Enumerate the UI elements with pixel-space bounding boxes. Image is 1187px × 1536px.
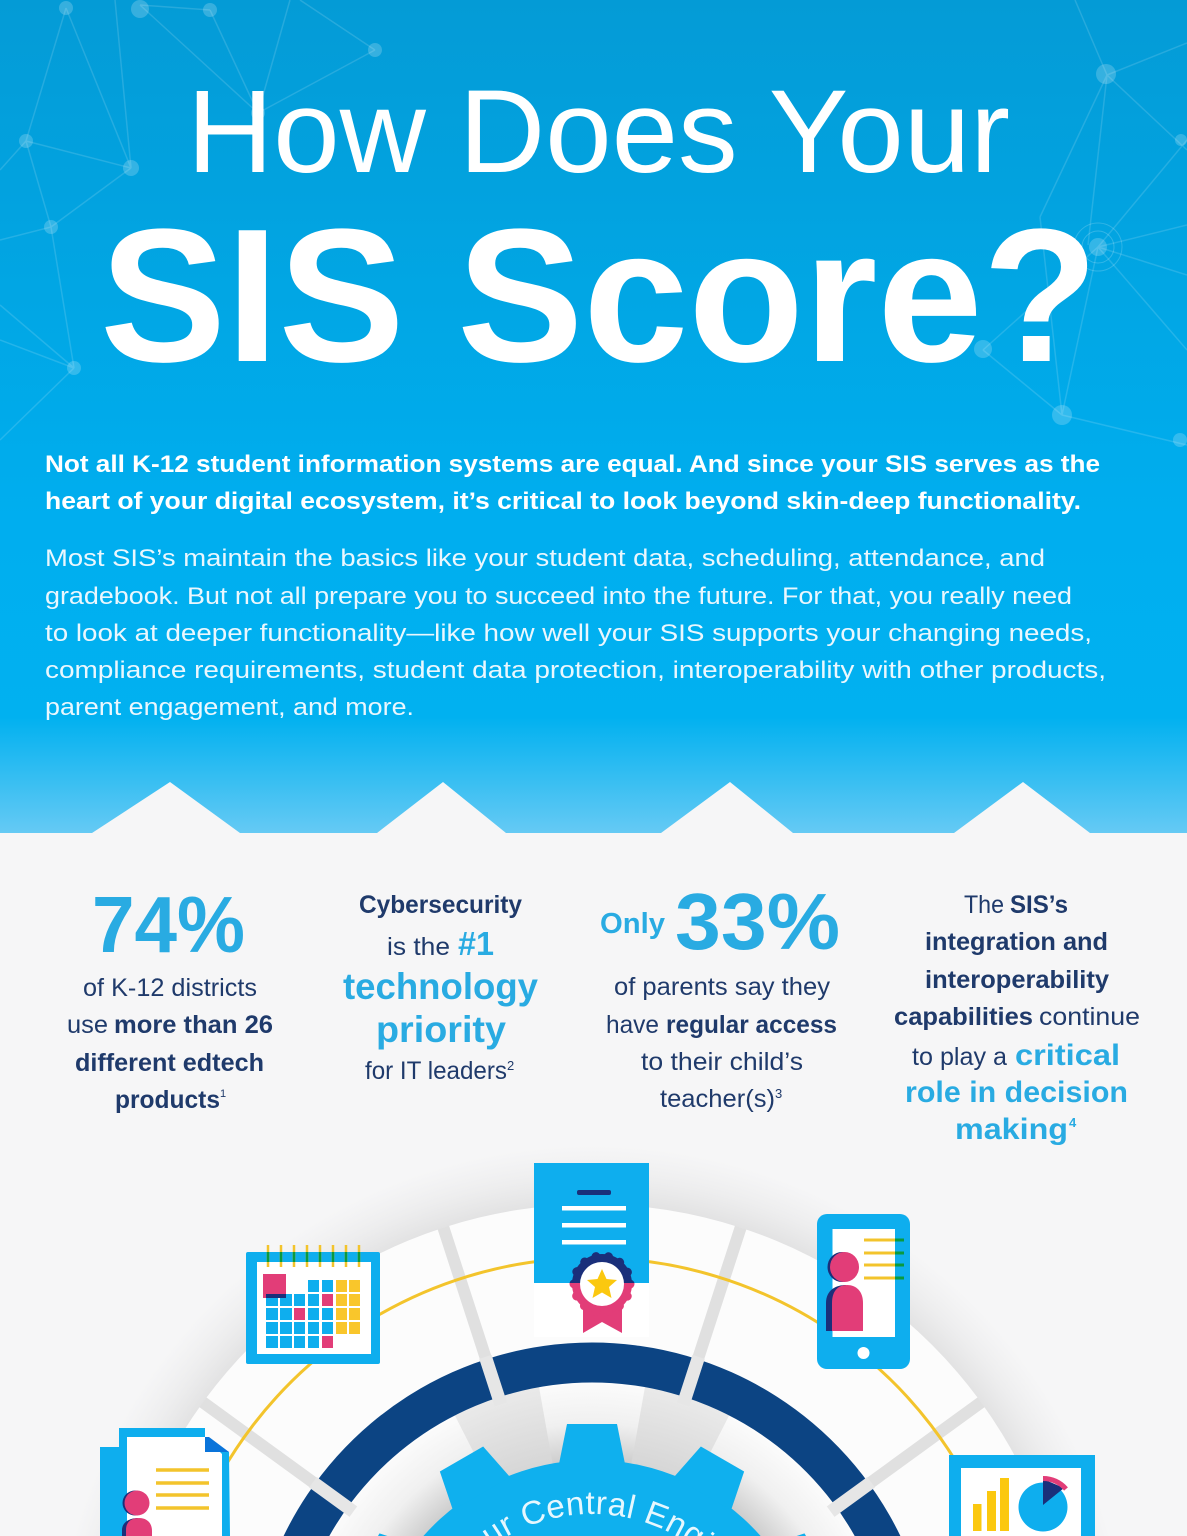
icon: chart [949, 1455, 1095, 1536]
icon: certificate [534, 1163, 649, 1337]
wheel disc [73, 1145, 1111, 1536]
stat: only 33%: Only [600, 908, 665, 940]
header background [0, 0, 1187, 834]
stat: cybersecurity: Cybersecurity [359, 891, 522, 919]
stat: cybersecurity: technology [343, 966, 538, 1007]
intro paragraph: Most SIS’s maintain the basics like your student data, scheduling, attendance, and [45, 545, 1045, 572]
stat: 74%: 1 [220, 1088, 226, 1100]
stat: only 33%: teacher(s) [660, 1085, 775, 1113]
stat: cybersecurity [343, 891, 538, 1085]
stat: integration: to play a [912, 1043, 1007, 1071]
wheel diagram [153, 1179, 1046, 1536]
network pattern left [0, 0, 375, 440]
title: SIS Score? [100, 190, 1098, 402]
light lower panel with peaks [0, 782, 1187, 1536]
stat: integration: continue [1039, 1003, 1140, 1031]
title: How Does Your [187, 66, 1010, 198]
intro text bold [45, 451, 1100, 515]
stat: cybersecurity: for IT leaders [365, 1057, 507, 1085]
wheel spokes outer [203, 1228, 981, 1506]
stat: only 33%: 3 [775, 1086, 782, 1101]
stat: only 33%: regular access [666, 1011, 837, 1039]
gear [378, 1424, 806, 1536]
stat: cybersecurity: 2 [507, 1058, 514, 1073]
dark blue ring [284, 1342, 900, 1536]
stat: integration: The [964, 891, 1004, 919]
intro paragraph: to look at deeper functionality—like how well your SIS supports your changing needs, [45, 620, 1092, 647]
icon: document [100, 1428, 230, 1536]
stat: integration: critical [1015, 1039, 1120, 1072]
network nodes left [19, 0, 382, 375]
stat: 74%: products [115, 1086, 220, 1114]
stat: 74%: use [67, 1011, 108, 1039]
stat: 74%: different edtech [75, 1049, 264, 1077]
stat: integration: making [955, 1113, 1068, 1146]
intro paragraph: gradebook. But not all prepare you to succeed into the future. For that, you really need [45, 583, 1072, 610]
yellow orbit [192, 1258, 992, 1536]
stat: integration: interoperability [925, 966, 1109, 994]
title [100, 66, 1098, 402]
stat: cybersecurity: is the [387, 933, 450, 961]
stat: cybersecurity: priority [376, 1009, 506, 1050]
stat: only 33%: of parents say they [614, 973, 831, 1001]
stat: only 33%: 33% [675, 877, 840, 966]
stat: 74%: 74% [92, 880, 245, 969]
network nodes right [974, 64, 1187, 447]
stat: 74% [67, 880, 273, 1114]
intro paragraph: parent engagement, and more. [45, 694, 414, 721]
intro text bold: heart of your digital ecosystem, it’s critical to look beyond skin-deep functionality. [45, 488, 1081, 515]
stat: integration: SIS’s [1010, 891, 1068, 919]
icon: phone [817, 1214, 910, 1369]
intro paragraph [45, 545, 1106, 721]
stat: integration: capabilities [894, 1003, 1033, 1031]
stat: only 33% [600, 877, 840, 1113]
stat: 74%: more than 26 [114, 1011, 273, 1039]
stat: integration: role in decision [905, 1076, 1128, 1109]
stat: cybersecurity: #1 [458, 925, 494, 962]
icon: calendar [246, 1245, 380, 1364]
inner shadow wedges [447, 1370, 737, 1536]
inner disc with gear shadow [330, 1384, 854, 1536]
stat: only 33%: to their child’s [641, 1048, 803, 1076]
network pattern right [983, 0, 1187, 445]
stat: integration: integration and [925, 928, 1108, 956]
stat: integration [894, 891, 1140, 1146]
intro text bold: Not all K-12 student information systems are equal. And since your SIS serves as the [45, 451, 1100, 478]
stat: 74%: of K-12 districts [83, 974, 257, 1002]
stat: integration: 4 [1069, 1115, 1077, 1130]
intro paragraph: compliance requirements, student data protection, interoperability with other products, [45, 657, 1106, 684]
stat: only 33%: have [606, 1011, 659, 1039]
ring gaps [313, 1357, 871, 1512]
